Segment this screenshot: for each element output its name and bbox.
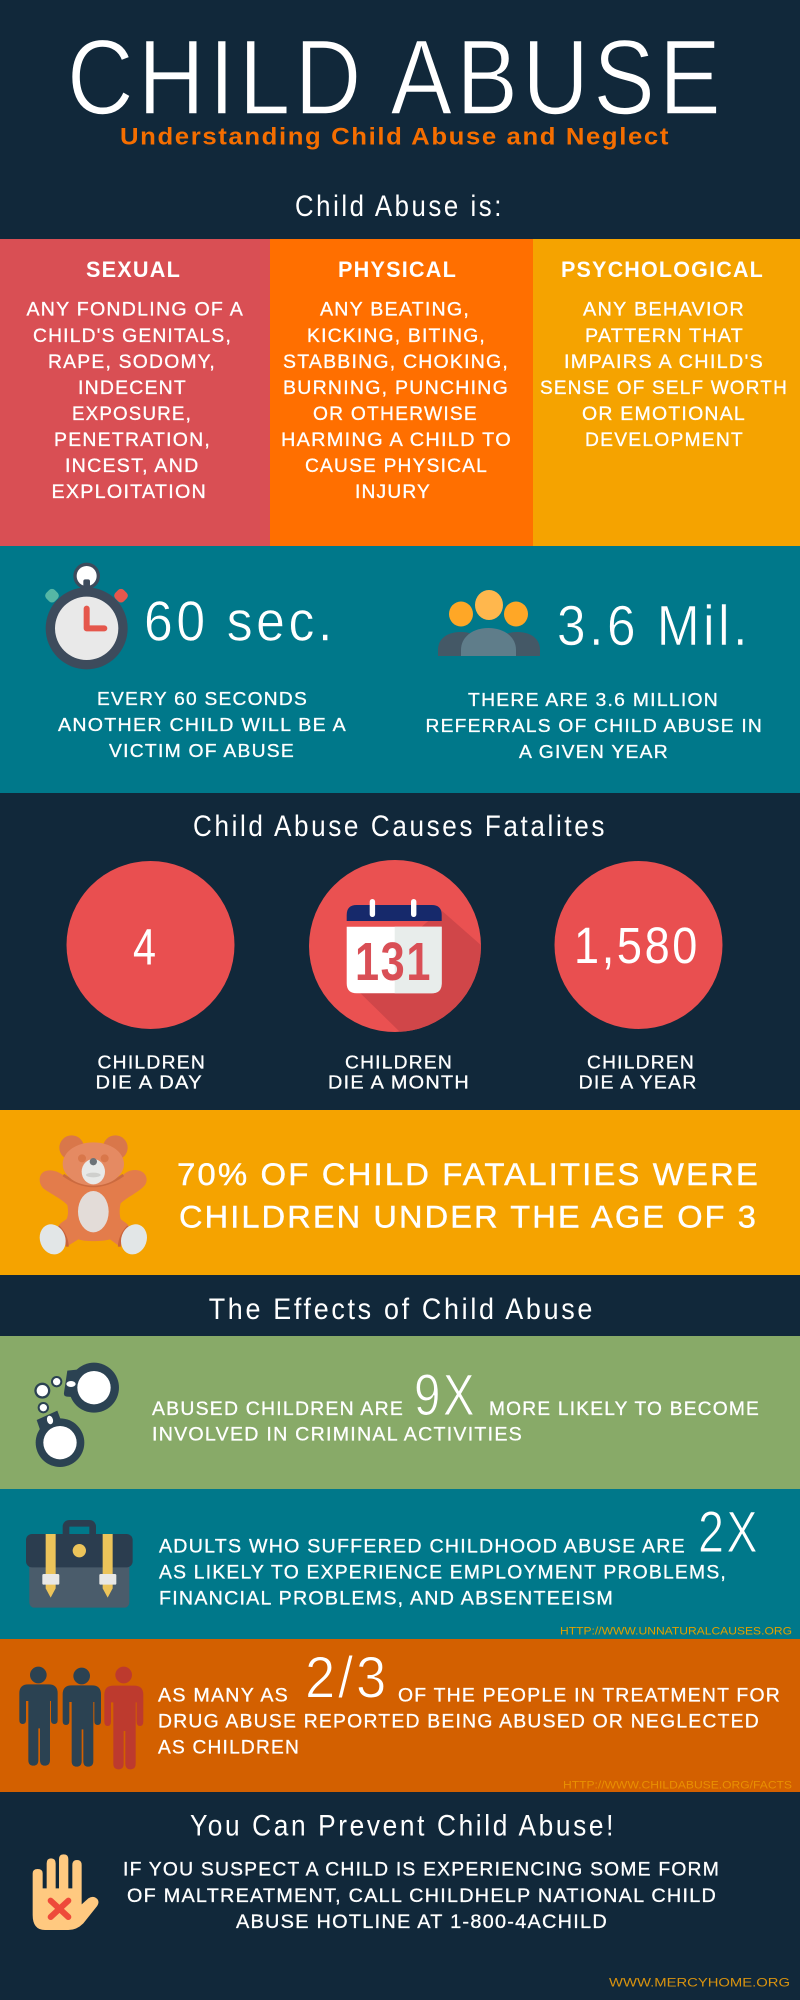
text: sexual definition: INCEST, AND [65,456,200,477]
heading: child abuse is: Child Abuse is: [295,190,504,223]
panel: drug abuse effect [0,1639,800,1792]
text: sexual definition: EXPLOITATION [52,482,207,503]
heading: fatalities: Child Abuse Causes Fatalites [193,810,607,843]
text: 2X employment problems: FINANCIAL PROBLEMS, AND ABSENTEEISM [159,1589,614,1610]
caption: children die a day: CHILDREN [98,1052,206,1073]
text: 2X employment problems: ADULTS WHO SUFFERED CHILDHOOD ABUSE ARE [159,1537,686,1558]
text: physical definition: HARMING A CHILD TO [281,430,512,451]
icon: stop hand [33,1854,99,1930]
footer link: WWW.MERCYHOME.ORG [609,1976,790,1990]
heading: effects: The Effects of Child Abuse [209,1293,595,1326]
heading: prevention: You Can Prevent Child Abuse! [190,1810,616,1843]
panel: header [0,0,800,239]
text: sexual definition: PENETRATION, [54,430,211,451]
text: 2X employment problems [159,1500,760,1610]
caption: children die a month: DIE A MONTH [328,1072,470,1093]
text: hotline message: ABUSE HOTLINE AT 1-800-4ACHILD [236,1912,608,1933]
text: 2/3 in treatment: AS MANY AS [158,1686,289,1707]
panel: criminal activity effect [0,1336,800,1489]
text: 2X employment problems: 2X [698,1500,760,1565]
text: 2/3 in treatment [158,1646,781,1759]
panel: physical abuse [270,239,533,546]
panel: effects heading band [0,1275,800,1336]
text: physical definition [281,300,512,503]
text: psychological definition: SENSE OF SELF WORTH [540,378,788,399]
text: hotline message [123,1860,720,1933]
text: 70 percent of fatalities: CHILDREN UNDER THE AGE OF 3 [179,1199,758,1235]
text: sexual definition: EXPOSURE, [72,404,192,425]
text: 70 percent of fatalities: 70% OF CHILD FATALITIES WERE [177,1156,760,1192]
text: physical definition: INJURY [355,482,431,503]
text: 3.6 million referrals: THERE ARE 3.6 MILLION [468,689,719,710]
text: sexual definition [26,300,244,503]
stat: 60 sec: 60 sec. [144,590,336,654]
text: 9X more likely: ABUSED CHILDREN ARE [152,1399,404,1420]
text: physical definition: KICKING, BITING, [307,326,486,347]
text: every 60 seconds: EVERY 60 SECONDS [97,688,308,709]
text: physical definition: OR OTHERWISE [313,404,478,425]
source link: unnatural causes: HTTP://WWW.UNNATURALCAUSES.ORG [560,1626,792,1638]
stat: 3.6 Mil: 3.6 Mil. [557,594,751,658]
heading: psychological: PSYCHOLOGICAL [561,257,764,282]
text: 70 percent of fatalities [177,1156,760,1235]
text: psychological definition [540,300,788,451]
panel: 70 percent callout [0,1110,800,1275]
icon: handcuffs [34,1363,119,1467]
source link: childabuse.org: HTTP://WWW.CHILDABUSE.ORG/FACTS [563,1780,792,1792]
text: physical definition: CAUSE PHYSICAL [305,456,488,477]
subtitle: Understanding Child Abuse and Neglect [120,124,670,150]
icon: three people [19,1667,143,1769]
stat circle: 4 a day: 4 [133,919,156,976]
text: physical definition: STABBING, CHOKING, [283,352,509,373]
text: 2/3 in treatment: AS CHILDREN [158,1738,300,1759]
text: sexual definition: ANY FONDLING OF A [26,300,244,321]
panel: psychological abuse [533,239,800,546]
caption: children die a year [579,1052,698,1093]
panel: employment effect [0,1489,800,1639]
icon: teddy bear [36,1135,151,1258]
caption: children die a year: CHILDREN [587,1052,695,1073]
text: physical definition: ANY BEATING, [320,300,470,321]
text: 9X more likely: INVOLVED IN CRIMINAL ACTIVITIES [152,1425,523,1446]
caption: children die a month: CHILDREN [345,1052,453,1073]
panel: key statistics [0,546,800,793]
stat circle: 1,580 a year: 1,580 [574,917,700,974]
text: psychological definition: DEVELOPMENT [585,430,744,451]
stat circle: calendar 131 a month: 131 [355,932,432,992]
stat circle: 1,580 a year [554,861,722,1029]
text: every 60 seconds: VICTIM OF ABUSE [109,740,295,761]
text: sexual definition: INDECENT [78,378,187,399]
text: 3.6 million referrals: REFERRALS OF CHILD ABUSE IN [426,715,763,736]
text: 9X more likely: MORE LIKELY TO BECOME [489,1399,760,1420]
text: psychological definition: PATTERN THAT [585,326,744,347]
text: sexual definition: RAPE, SODOMY, [48,352,216,373]
text: every 60 seconds [58,688,347,761]
text: 2/3 in treatment: 2/3 [305,1646,389,1711]
text: 3.6 million referrals [426,689,763,762]
caption: children die a month [328,1052,470,1093]
heading: sexual: SEXUAL [86,257,181,282]
caption: children die a day [96,1052,206,1093]
text: sexual definition: CHILD'S GENITALS, [33,326,232,347]
text: 3.6 million referrals: A GIVEN YEAR [519,741,669,762]
text: 2/3 in treatment: DRUG ABUSE REPORTED BEING ABUSED OR NEGLECTED [158,1712,760,1733]
icon: briefcase [26,1523,133,1608]
stat circle: calendar 131 a month [309,860,490,1040]
text: hotline message: IF YOU SUSPECT A CHILD IS EXPERIENCING SOME FORM [123,1860,720,1881]
panel: prevention [0,1792,800,2000]
text: physical definition: BURNING, PUNCHING [283,378,509,399]
panel: fatalities [66,814,722,1089]
text: psychological definition: ANY BEHAVIOR [583,300,745,321]
text: 9X more likely [152,1363,760,1446]
caption: children die a year: DIE A YEAR [579,1072,698,1093]
panel: sexual abuse [0,239,270,546]
text: 2X employment problems: AS LIKELY TO EXPERIENCE EMPLOYMENT PROBLEMS, [159,1563,727,1584]
heading: physical: PHYSICAL [338,257,457,282]
text: psychological definition: OR EMOTIONAL [582,404,746,425]
text: psychological definition: IMPAIRS A CHILD'S [564,352,764,373]
stat circle: 4 a day [66,861,234,1029]
text: hotline message: OF MALTREATMENT, CALL CHILDHELP NATIONAL CHILD [127,1886,717,1907]
icon: stopwatch [44,563,129,669]
text: 9X more likely: 9X [414,1363,477,1428]
caption: children die a day: DIE A DAY [96,1072,203,1093]
icon: group of people [438,590,540,656]
text: every 60 seconds: ANOTHER CHILD WILL BE A [58,714,347,735]
text: 2/3 in treatment: OF THE PEOPLE IN TREATMENT FOR [398,1686,781,1707]
